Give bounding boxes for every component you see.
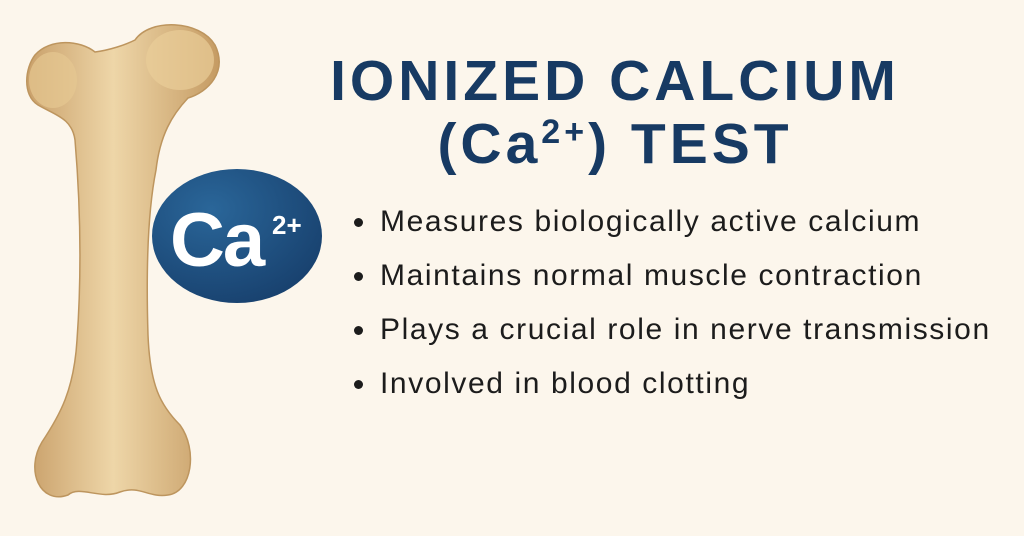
Ca2+ badge <box>152 169 322 303</box>
title <box>330 49 900 176</box>
Ca2+ badge: Ca <box>170 198 266 283</box>
bullet list: Involved in blood clotting <box>380 367 750 400</box>
bullet list: Measures biologically active calcium <box>380 205 921 238</box>
title: IONIZED CALCIUM <box>330 49 900 113</box>
bullet list <box>354 205 991 400</box>
bullet list: Plays a crucial role in nerve transmission <box>380 313 991 346</box>
title: (Ca2+) TEST <box>437 112 793 176</box>
Ca2+ badge: 2+ <box>272 210 302 240</box>
bullet list: Maintains normal muscle contraction <box>380 259 923 292</box>
bone illustration <box>26 24 220 498</box>
